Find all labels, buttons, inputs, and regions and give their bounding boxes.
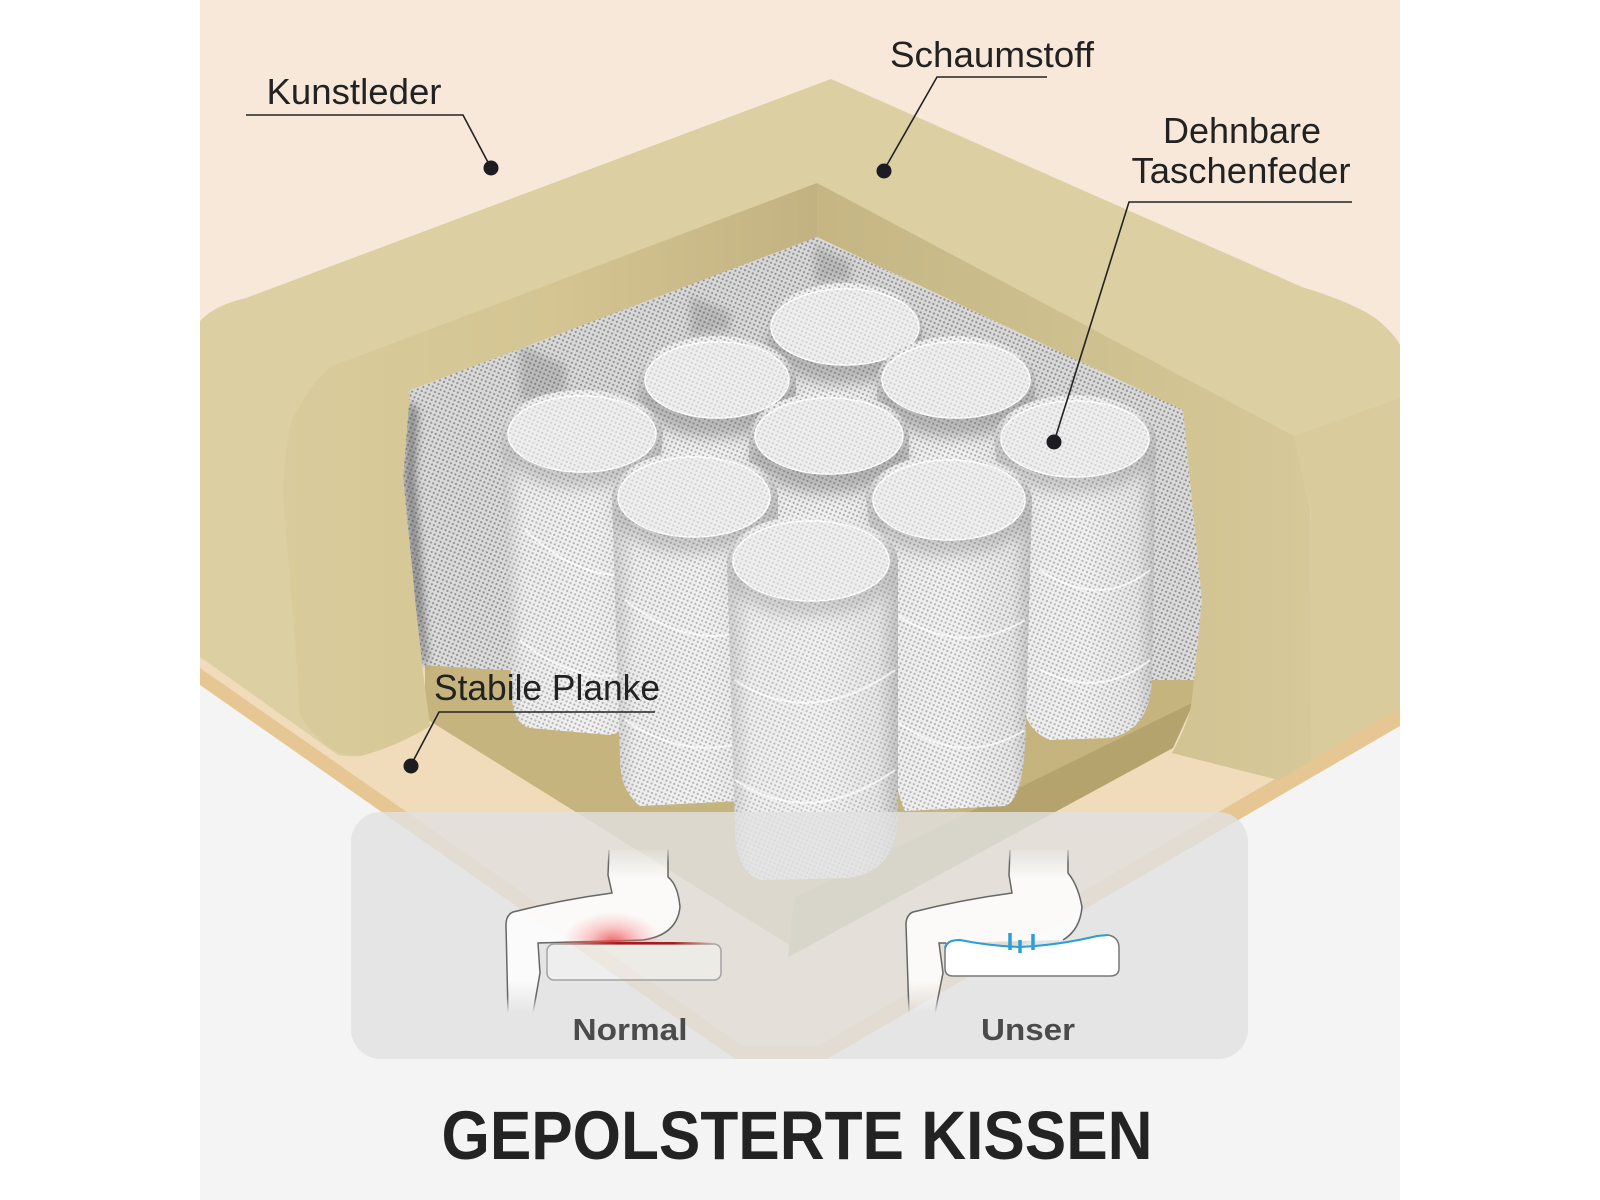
label: unser: Unser: [981, 1012, 1075, 1047]
callout: Dehnbare Taschenfeder: Taschenfeder: [1132, 150, 1351, 191]
wooden plank: [200, 600, 1400, 1059]
title: GEPOLSTERTE KISSEN: [442, 1097, 1152, 1174]
spring D: [501, 390, 663, 735]
artificial leather background: [200, 0, 1400, 420]
illustration: our cushion: [906, 850, 1119, 1047]
spring I: [727, 515, 898, 880]
spring A: [768, 283, 922, 520]
callout: Schaumstoff: [876, 34, 1095, 178]
comparison panel: [351, 812, 1248, 1059]
right cut face: [817, 183, 1311, 780]
foam padding layer: [200, 79, 1400, 780]
foam base slab: [425, 640, 1197, 957]
pocket spring coils: [501, 283, 1156, 880]
callout: Kunstleder: [246, 71, 498, 176]
spring F: [994, 395, 1156, 740]
back row of pocket springs: [403, 237, 1202, 680]
spring B: [638, 336, 796, 620]
illustration: normal cushion: [506, 850, 721, 1047]
spring C: [877, 336, 1035, 620]
spring G: [612, 451, 778, 806]
right outer foam: [1294, 398, 1400, 761]
infographic: cushion cross-section: [200, 0, 1400, 1200]
left cut face: [283, 183, 817, 756]
callout: Dehnbare Taschenfeder: Dehnbare: [1163, 110, 1321, 151]
callout: Stabile Planke: Stabile Planke: [434, 667, 660, 708]
label: normal: Normal: [572, 1012, 688, 1047]
callout: Dehnbare Taschenfeder: [1046, 110, 1352, 450]
callout: Kunstleder: Kunstleder: [266, 71, 442, 112]
spring H: [866, 454, 1032, 811]
callout: Schaumstoff: Schaumstoff: [890, 34, 1095, 75]
callout: Stabile Planke: [404, 667, 660, 774]
spring E: [749, 392, 909, 680]
